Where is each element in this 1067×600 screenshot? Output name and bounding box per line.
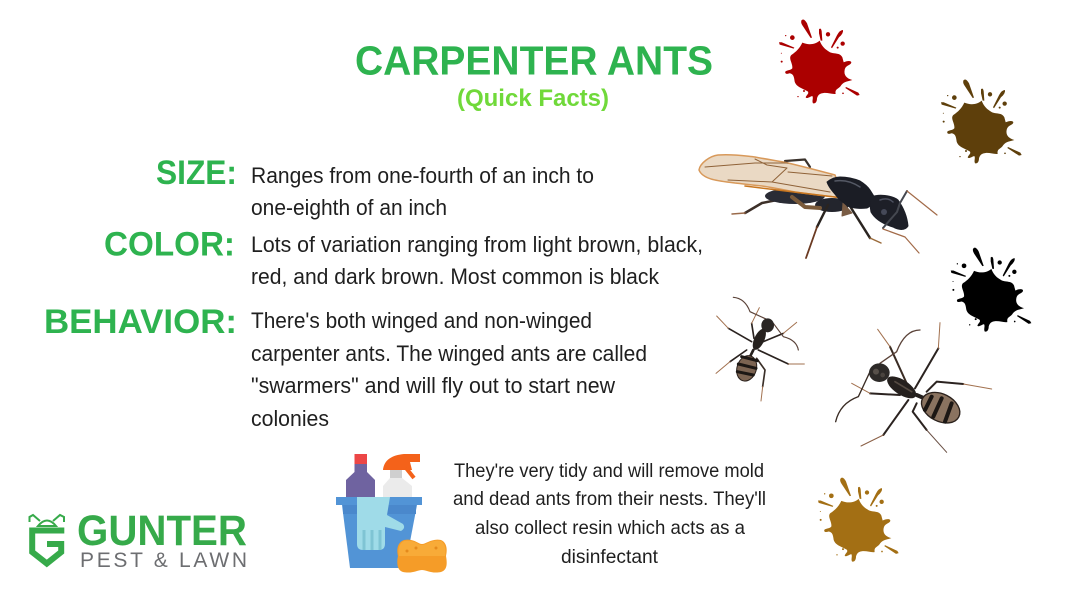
color heading: COLOR: bbox=[104, 226, 235, 264]
size description: one-eighth of an inch bbox=[251, 195, 447, 220]
subtitle: (Quick Facts) bbox=[457, 85, 609, 112]
winged ant bbox=[699, 155, 937, 258]
behavior description: "swarmers" and will fly out to start new bbox=[251, 373, 615, 398]
glove bbox=[357, 497, 404, 550]
behavior description: There's both winged and non-winged bbox=[251, 308, 592, 333]
size description: Ranges from one-fourth of an inch to bbox=[251, 163, 594, 188]
wordmark: GUNTER bbox=[77, 507, 247, 555]
color description: red, and dark brown. Most common is black bbox=[251, 264, 660, 289]
behavior description bbox=[251, 308, 647, 431]
behavior heading: BEHAVIOR: bbox=[44, 303, 237, 341]
tidy habits text block: They're very tidy and will remove mold bbox=[454, 460, 764, 482]
size description bbox=[251, 163, 594, 220]
bucket body bbox=[342, 505, 417, 568]
icon: red splat bbox=[779, 19, 860, 103]
logo: Gunter Pest & Lawn bbox=[30, 507, 247, 572]
purple bottle bbox=[346, 454, 375, 497]
behavior description: carpenter ants. The winged ants are called bbox=[251, 341, 647, 366]
tidy habits text block: and dead ants from their nests. They'll bbox=[453, 488, 766, 510]
behavior description: colonies bbox=[251, 406, 329, 431]
icon: golden brown splat bbox=[818, 478, 899, 562]
color description: Lots of variation ranging from light brown, black, bbox=[251, 232, 703, 257]
behavior section bbox=[44, 303, 647, 431]
spray bottle bbox=[383, 454, 420, 497]
color description bbox=[251, 232, 703, 289]
size heading: SIZE: bbox=[156, 154, 237, 192]
sponge bbox=[397, 540, 447, 573]
icon: cleaning bucket bbox=[336, 454, 447, 573]
tagline: PEST & LAWN bbox=[80, 549, 247, 572]
tidy habits text block bbox=[453, 460, 766, 568]
icon: shield with ant bbox=[30, 515, 64, 564]
tidy habits text block: also collect resin which acts as a bbox=[475, 517, 745, 539]
tidy habits text block: disinfectant bbox=[561, 546, 659, 568]
size section bbox=[156, 154, 594, 220]
title: CARPENTER ANTS bbox=[355, 38, 713, 84]
small ant bbox=[716, 297, 804, 401]
color section bbox=[104, 226, 703, 289]
large ant bbox=[836, 323, 992, 452]
icon: black splat bbox=[951, 248, 1031, 332]
icon: dark brown splat bbox=[941, 79, 1022, 163]
